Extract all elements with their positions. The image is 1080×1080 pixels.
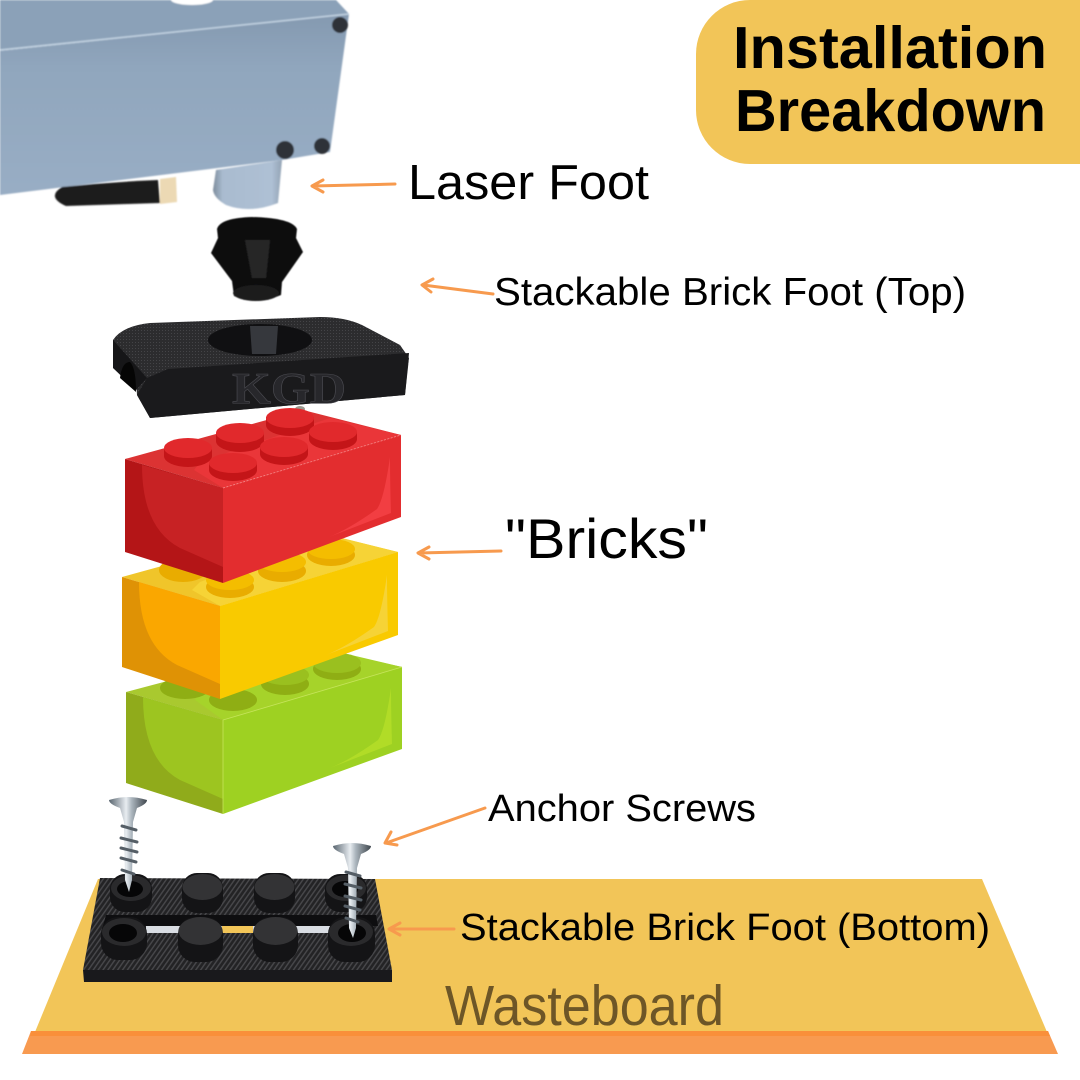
label: bricks: "Bricks" [505,507,708,570]
arrow: brick foot bottom [389,923,454,935]
stackable brick foot top: block with KGD engraving [113,317,409,418]
title badge [696,0,1080,164]
anchor screw right [333,843,371,938]
studs [164,408,357,481]
arrow: laser foot [312,180,395,192]
arrow: brick foot top [422,279,493,294]
brick: red [125,406,401,583]
arrow: anchor screws [385,808,485,845]
anchor screw left [109,797,147,892]
label: wasteboard: Wasteboard [445,974,724,1038]
antenna [55,177,177,206]
plate studs [101,873,375,962]
wasteboard [22,879,1058,1054]
label: brick foot top: Stackable Brick Foot (Top) [494,271,966,314]
studs [160,653,361,711]
arrow: bricks [418,547,501,559]
label: anchor screws: Anchor Screws [488,788,756,830]
laser module photo [0,0,349,209]
title badge: Breakdown [735,78,1046,144]
stackable brick foot top: block with KGD engraving: KGD [232,364,346,413]
stackable brick foot bottom: plate [83,873,392,982]
brick: yellow [122,528,398,699]
title badge: Installation [733,15,1047,81]
plate slot [146,926,330,933]
brick: green [126,645,402,814]
stackable brick foot top: cone insert [211,217,303,301]
studs [159,539,355,598]
label: brick foot bottom: Stackable Brick Foot (Bottom) [460,907,990,949]
label: laser foot: Laser Foot [408,156,649,210]
box screws [276,17,348,159]
laser foot cylinder [213,160,282,209]
